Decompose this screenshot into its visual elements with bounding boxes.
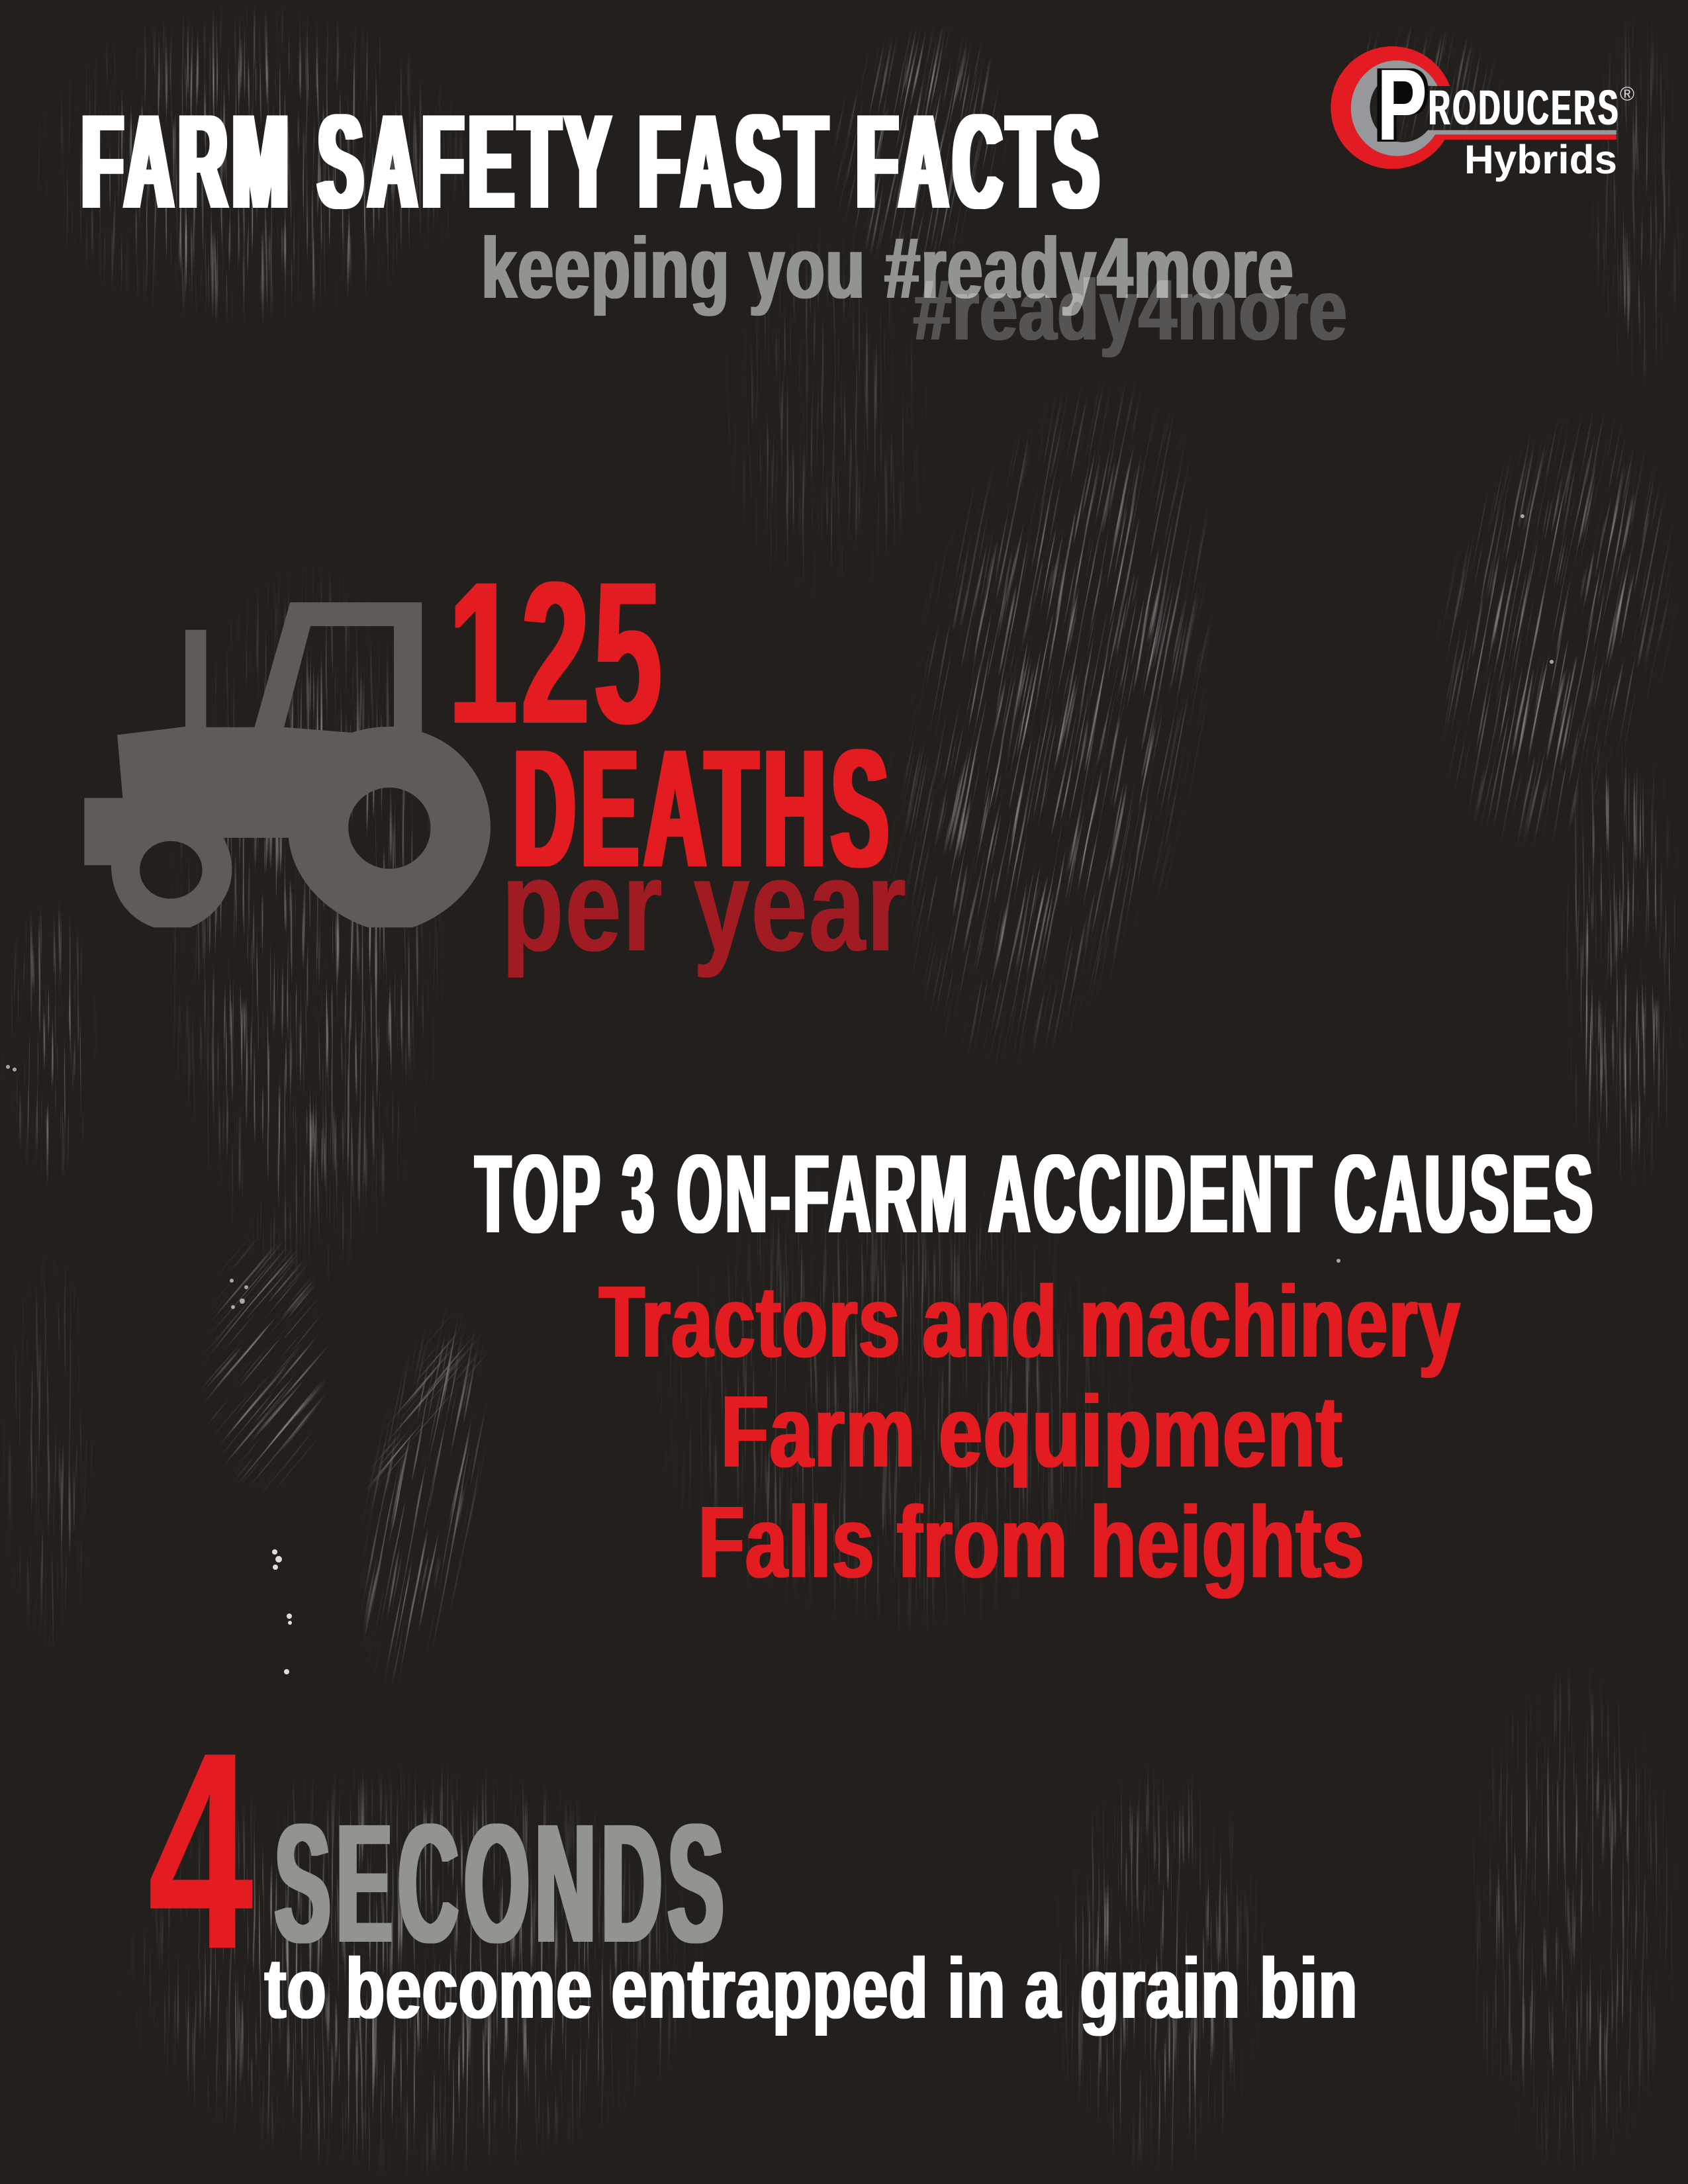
logo letter P: P (1378, 48, 1427, 161)
tagline: keeping you #ready4more (481, 219, 1294, 316)
icon: tractor (84, 602, 491, 927)
stat: 4: 4 (148, 1694, 254, 2007)
registered mark: ® (1620, 83, 1634, 105)
logo: Producers Hybrids (1331, 46, 1634, 182)
text: SECONDS (275, 1789, 729, 1978)
cause 3: Falls from heights (698, 1485, 1365, 1599)
tagline echo: #ready4more (914, 261, 1348, 358)
stat: DEATHS: DEATHS (514, 714, 894, 902)
stat: 125: 125 (449, 539, 666, 766)
cause 2: Farm equipment (721, 1375, 1343, 1488)
logo ring red and grey swoosh (1331, 46, 1617, 169)
stat: per year: per year (502, 832, 908, 978)
logo Hybrids: Hybrids (1464, 137, 1617, 182)
